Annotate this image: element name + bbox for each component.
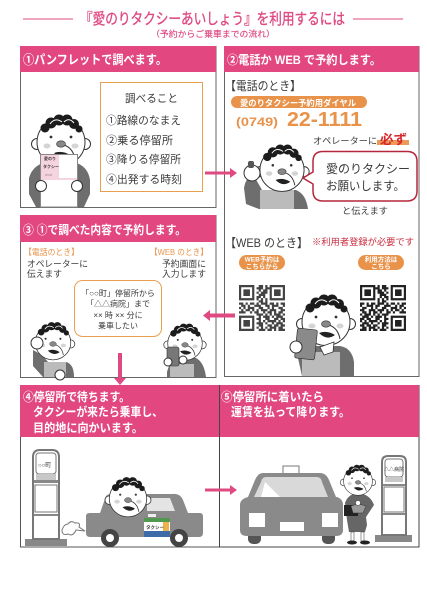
web heading: 【WEB のとき】 [225, 236, 308, 250]
taxi door sticker: タクシー [146, 524, 164, 531]
title: 『愛のりタクシーあいしょう』を利用するには [80, 10, 345, 28]
operator note: オペレーターに [313, 136, 377, 146]
example message bubble: 「○○町」停留所から [81, 288, 155, 298]
person on phone [31, 322, 75, 380]
example message bubble [74, 280, 162, 336]
dial label pill: 愛のりタクシー予約用ダイヤル [240, 98, 356, 108]
panel: step 3 booking details [20, 215, 216, 380]
bus stop sign [25, 450, 67, 546]
speech bubble [303, 152, 417, 201]
step 3 heading: ③ ①で調べた内容で予約します。 [23, 222, 186, 237]
step 4 heading: 目的地に向かいます。 [33, 420, 143, 435]
phone number [236, 109, 362, 131]
example message bubble: 乗車したい [98, 320, 138, 330]
checklist box: ②乗る停留所 [106, 133, 173, 147]
step 2 heading [224, 46, 419, 72]
person on phone [244, 145, 309, 209]
taxi door sticker [144, 518, 170, 537]
arrow: step 3 to step 4 [114, 353, 126, 385]
person holding pamphlet: ○○○ [45, 172, 53, 177]
phone instructions: オペレーターに [27, 259, 88, 269]
taxi side view [86, 477, 203, 547]
person with smartphone [164, 324, 206, 377]
phone instructions [24, 247, 88, 279]
step 2 heading: ②電話か WEB で予約します。 [227, 52, 381, 67]
example message bubble: 「△△病院」まで [86, 300, 150, 308]
QR code: booking [239, 286, 285, 330]
web booking pill: こちらから [246, 262, 278, 270]
web instructions: 予約画面に [162, 258, 206, 269]
web instructions: 入力します [162, 268, 206, 279]
smoke puff [62, 522, 85, 535]
person holding pamphlet: 愛のり [44, 155, 56, 161]
usage pill: 利用方法は [365, 254, 398, 264]
person with smartphone [290, 294, 356, 376]
panel: step 4 waiting at stop [20, 385, 220, 547]
usage pill [358, 254, 404, 270]
step 5 heading: ⑤停留所に着いたら [221, 389, 324, 404]
operator note: 必ず [380, 132, 407, 147]
example message bubble: ×× 時 ×× 分に [93, 311, 143, 320]
web booking pill [239, 254, 285, 270]
step 4 heading: タクシーが来たら乗車し、 [33, 404, 163, 419]
step 3 heading [20, 215, 216, 242]
phone heading: 【電話のとき】 [225, 79, 301, 93]
title: （予約からご乗車までの流れ） [151, 29, 275, 39]
step 4 heading [20, 385, 219, 437]
step 1 heading [20, 46, 216, 72]
person holding pamphlet [29, 114, 90, 207]
panel: step 1 pamphlet [20, 46, 216, 208]
web booking pill: WEB予約は [245, 254, 280, 264]
speech bubble: お願いします。 [326, 179, 405, 193]
bus stop sign: △△病院 [384, 466, 404, 473]
speech bubble: 愛のりタクシー [326, 162, 410, 176]
step 5 heading: 運賃を払って降ります。 [231, 404, 350, 419]
phone number: (0749) [236, 115, 278, 129]
checklist box: ①路線のなまえ [106, 114, 181, 127]
phone instructions: 【電話のとき】 [24, 247, 79, 257]
checklist box [100, 82, 202, 192]
taxi front view [240, 466, 343, 544]
arrow: step 4 to step 5 [205, 485, 237, 495]
arrow: step 2 to step 3 [203, 310, 235, 321]
usage pill: こちら [371, 262, 391, 270]
bus stop sign [375, 456, 412, 542]
panel: step 2 phone or web [224, 46, 419, 376]
closing note: と伝えます [342, 206, 388, 216]
arrow: step 1 to step 2 [205, 168, 237, 178]
QR code: usage [360, 286, 406, 330]
web instructions: 【WEB のとき】 [150, 247, 208, 257]
checklist box: ③降りる停留所 [106, 152, 181, 166]
checklist box: 調べること [125, 92, 178, 105]
woman paying fare [340, 465, 376, 544]
step 1 heading: ①パンフレットで調べます。 [23, 53, 167, 67]
step 4 heading: ④停留所で待ちます。 [23, 389, 130, 404]
checklist box: ④出発する時刻 [106, 172, 182, 186]
phone number: 22-1111 [287, 109, 362, 131]
operator note [313, 132, 409, 147]
bus stop sign: ○○町 [38, 462, 51, 469]
step 5 heading [220, 385, 419, 437]
web instructions [150, 247, 208, 279]
registration note: ※利用者登録が必要です [312, 236, 414, 247]
title [23, 10, 403, 39]
person holding pamphlet: タクシー [43, 163, 59, 169]
panel: step 5 arrival and fare [220, 385, 419, 547]
phone instructions: 伝えます [27, 269, 62, 279]
